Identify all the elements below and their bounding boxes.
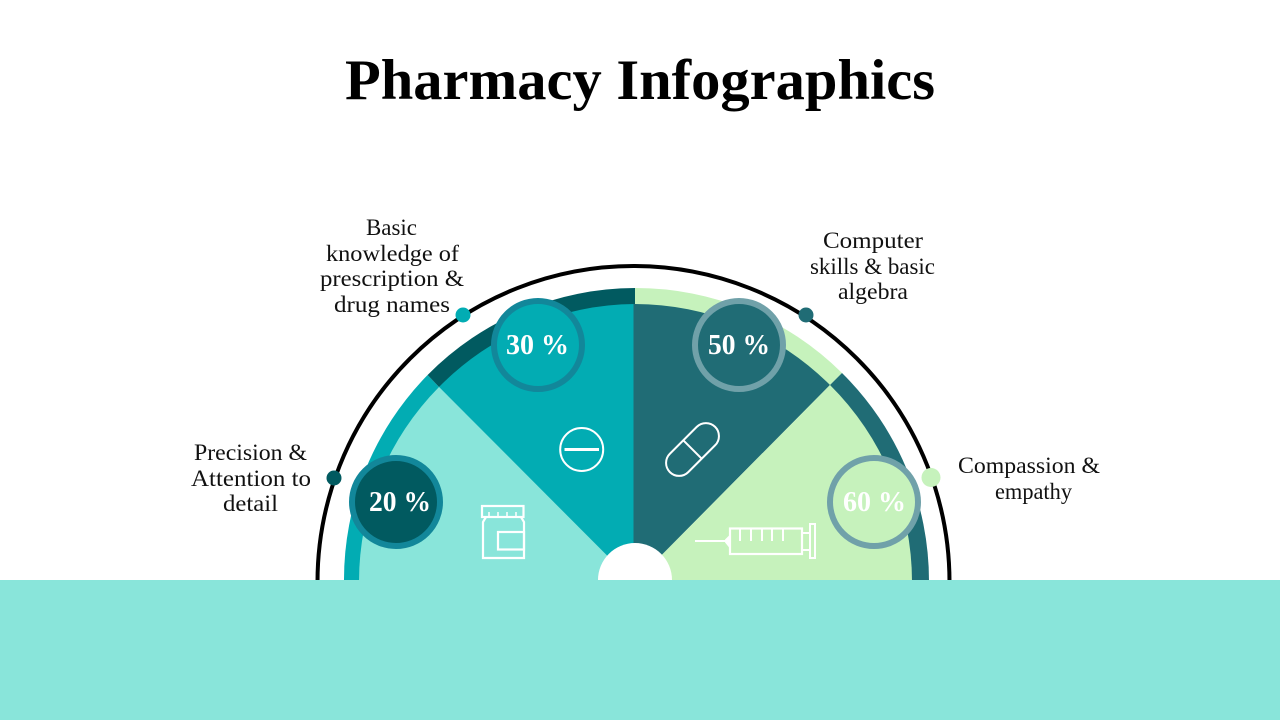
ring segment: 30% <box>428 288 635 387</box>
label: computer skills <box>810 228 935 304</box>
badge: 20% <box>352 458 440 546</box>
marker dot: 30% <box>456 308 470 322</box>
icon: syringe <box>695 524 815 558</box>
badge: 60%: 60 % <box>843 487 906 518</box>
bottom band <box>0 580 1280 720</box>
marker dot: 20% <box>326 470 342 486</box>
wedge: 60% <box>635 385 912 582</box>
label: basic knowledge: Basic <box>366 215 417 240</box>
outer black arc <box>318 266 950 582</box>
ring segment: 50% <box>635 288 842 385</box>
wedge: 20% <box>359 387 635 582</box>
badge: 60% <box>830 458 918 546</box>
label: precision: detail <box>223 491 278 516</box>
label: basic knowledge: knowledge of <box>326 241 459 266</box>
icon: jar <box>482 506 524 558</box>
icon: capsule <box>661 418 724 481</box>
label: compassion <box>958 453 1100 504</box>
badge: 20%: 20 % <box>369 487 431 518</box>
semicircle gauge <box>344 288 929 617</box>
label: precision: Precision & <box>194 440 307 465</box>
label: computer skills: algebra <box>838 279 908 304</box>
label: precision: Attention to <box>191 466 311 491</box>
label: compassion: empathy <box>995 479 1072 504</box>
center hub <box>598 543 672 617</box>
badge: 30% <box>494 301 582 389</box>
wedge: 30% <box>439 304 635 582</box>
badge: 30%: 30 % <box>506 330 569 361</box>
icon: no-entry circle <box>560 428 603 471</box>
badge: 50%: 50 % <box>708 330 770 361</box>
marker dot: 50% <box>798 308 814 322</box>
ring segment: 60% <box>830 373 929 582</box>
label: basic knowledge <box>320 215 464 317</box>
label: computer skills: skills & basic <box>810 254 935 279</box>
label: precision <box>191 440 311 516</box>
wedge: 50% <box>634 304 830 582</box>
badge: 50% <box>695 301 783 389</box>
ring segment: 20% <box>344 375 439 582</box>
label: basic knowledge: prescription & <box>320 266 464 291</box>
title: Pharmacy Infographics <box>345 49 935 112</box>
label: computer skills: Computer <box>823 228 923 253</box>
label: compassion: Compassion & <box>958 453 1100 478</box>
label: basic knowledge: drug names <box>334 292 450 317</box>
marker dot: 60% <box>922 468 940 487</box>
